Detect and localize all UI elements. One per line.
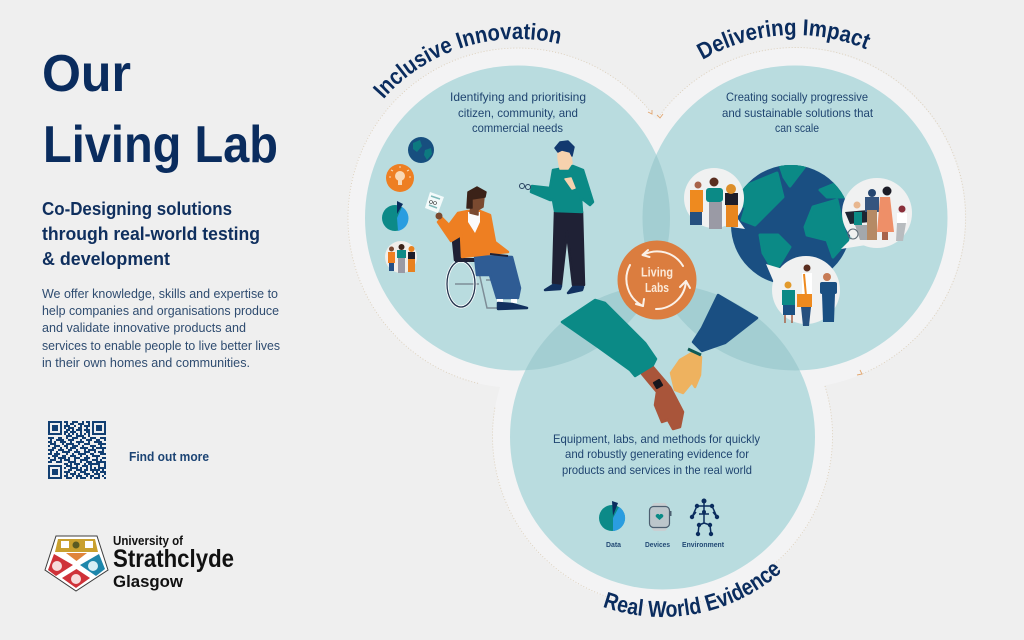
text: delivering impact description [722,90,874,135]
icon: small globe [408,137,434,163]
hair [467,187,486,208]
label: Data [606,540,622,549]
label: Devices [645,540,670,549]
shirt [468,212,480,233]
heading: Real World Evidence: Real World Evidence [604,564,780,618]
wheelchair [447,237,525,308]
intro text: and validate innovative products and [42,320,246,335]
title: Living Lab [43,116,278,174]
cardigan [438,211,508,257]
university logo: Glasgow [113,572,184,591]
icon: Living Labs badge: Labs [645,280,669,295]
heading: Delivering Impact: Delivering Impact [696,19,870,60]
cycle arrows [626,250,690,309]
subtitle: Co-Designing solutions [42,198,232,219]
trousers [553,212,584,285]
face [558,150,572,169]
intro text: We offer knowledge, skills and expertise to [42,286,278,301]
icon: smart watch device [645,503,672,549]
dotted cycle arcs with arrowheads [348,47,966,606]
text: inclusive innovation description: commercial needs [472,121,563,135]
illustration: two arms with wearables [562,295,757,429]
QR code [48,422,106,478]
text: real world evidence description: Equipment, labs, and methods for quickly [553,432,760,446]
illustration: earth globe [731,165,851,285]
speech bubble: inclusive group [841,178,912,249]
illustration: woman in wheelchair [425,187,527,309]
intro text: in their own homes and communities. [42,355,250,370]
armrest [490,254,508,256]
text: real world evidence description [553,432,760,477]
hand [565,178,575,189]
icon: small group of people [385,241,417,273]
text: delivering impact description: can scale [775,121,819,135]
intro text [42,286,280,370]
intro text: help companies and organisations produce [42,303,279,318]
glasses [520,184,530,190]
text: real world evidence description: and robustly generating evidence for [565,447,749,461]
text: inclusive innovation description [450,90,586,135]
left arm [562,300,683,429]
icon: Living Labs badge [618,240,696,320]
university logo: University of [113,533,184,548]
icon: body skeleton for environment [682,498,724,549]
title: Our [42,45,131,103]
icon: pie chart [382,201,408,231]
illustration: standing man [520,141,593,293]
right arm [671,295,757,393]
hair [555,141,574,156]
trousers [475,256,520,298]
text: inclusive innovation description: Identifying and prioritising [450,90,586,104]
panel: three venn circles [365,66,948,590]
subtitle: & development [42,248,170,269]
title [42,45,278,174]
face [470,197,484,215]
text: delivering impact description: and sustainable solutions that [722,106,874,120]
find out more link: Find out more [129,449,209,464]
speech bubble: workers group [684,168,745,229]
shoes [497,299,527,309]
sweater [531,166,593,212]
university logo [45,533,234,591]
label: Environment [682,540,724,549]
heading: Inclusive Innovation: Inclusive Innovation [372,22,560,98]
icon: light bulb [386,164,414,192]
subtitle: through real-world testing [42,223,260,244]
subtitle [42,198,260,269]
text: delivering impact description: Creating socially progressive [726,90,868,104]
circle halos [348,48,965,607]
speech bubble: family group [766,256,840,326]
hand and paper [425,192,444,220]
university logo: Strathclyde [113,545,234,573]
text: inclusive innovation description: citizen, community, and [458,106,578,120]
shield crest [45,536,108,591]
shoes [545,285,583,293]
text: real world evidence description: products and services in the real world [562,463,752,477]
intro text: services to enable people to live better lives [42,338,280,353]
icon: data pie chart [599,501,625,549]
icon: Living Labs badge: Living [641,264,673,280]
